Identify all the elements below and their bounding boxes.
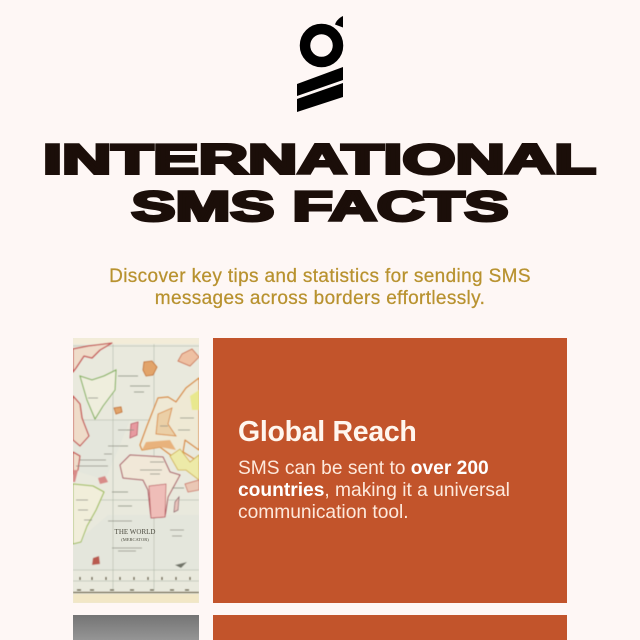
logo [297,16,344,112]
card body text: communication tool. [238,502,409,523]
title: SMS FACTS [132,182,508,230]
map lettering texture [76,376,194,551]
logo ring [305,29,338,62]
map graticule [73,344,199,590]
card body text: SMS can be sent to over 200 [238,458,489,479]
map scale ticks [77,577,190,590]
map caption [115,528,155,542]
small islands [92,556,100,565]
logo stripes [297,67,343,112]
logo tick [335,16,343,28]
north america [73,343,112,474]
africa [120,455,180,518]
greenland [80,370,116,419]
title [43,136,596,230]
panel: world map image [73,338,199,603]
subtitle: Discover key tips and statistics for sending SMS [109,266,531,286]
svalbard and iceland [114,361,157,414]
map caption: (MERCATOR) [121,537,149,542]
europe and russia [140,378,199,470]
panel: second image [73,615,199,640]
map sea tint [73,420,199,570]
card heading: Global Reach [238,416,417,448]
panel: global reach card [213,338,567,603]
card body text [238,458,510,523]
title: INTERNATIONAL [43,136,596,182]
subtitle [109,266,531,309]
arctic russia [178,349,199,366]
subtitle: messages across borders effortlessly. [155,288,485,309]
card body text: countries, making it a universal [238,480,510,501]
panel: second card [213,615,567,640]
middle east [170,449,199,480]
british isles [130,422,138,438]
south america [73,484,104,544]
map caption: THE WORLD [115,528,155,536]
